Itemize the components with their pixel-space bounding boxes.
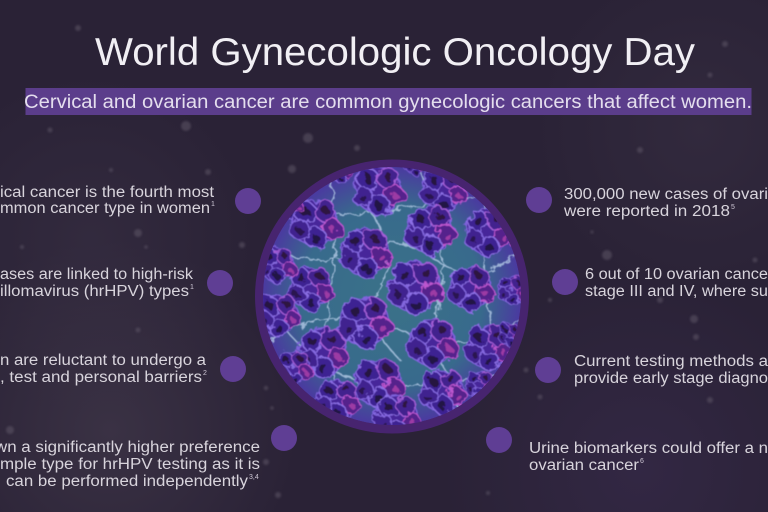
central cell illustration [255, 156, 529, 441]
title: World Gynecologic Oncology Day [95, 31, 696, 74]
left item 3: barriers: 2 [203, 370, 207, 377]
left item 2: hrHPV link: illomavirus (hrHPV) types [0, 283, 189, 300]
left item 3: barriers [0, 352, 246, 386]
left item 1: cervical cancer rank: ical cancer is the fourth most [0, 184, 215, 201]
left item 3: barriers: n are reluctant to undergo a [0, 352, 206, 369]
right item 3: testing methods: provide early stage diagno [574, 370, 768, 387]
left item 4: sample preference: 3,4 [249, 474, 259, 481]
right item 4: urine biomarkers: ovarian cancer [529, 457, 639, 474]
left item 2: hrHPV link [0, 266, 233, 300]
right item 1: new ovarian cases [526, 186, 768, 220]
left item 3: barriers: , test and personal barriers [0, 369, 202, 386]
left item 4: sample preference: wn a significantly higher preference [0, 439, 260, 456]
right item 2: late stage diagnosis: 6 out of 10 ovarian cance [585, 266, 768, 283]
right item 2: late stage diagnosis [552, 266, 768, 300]
right item 4: urine biomarkers: 6 [640, 458, 644, 465]
right item 3: testing methods: Current testing methods a [574, 353, 768, 370]
right item 4: urine biomarkers: Urine biomarkers could offer a n [529, 440, 768, 457]
left item 4: sample preference [0, 425, 297, 490]
left item 2: hrHPV link: 1 [190, 284, 194, 291]
left item 4: sample preference: mple type for hrHPV testing as it is [0, 456, 260, 473]
right item 1: new ovarian cases: 300,000 new cases of ovari [564, 186, 768, 203]
left item 2: hrHPV link: ases are linked to high-risk [0, 266, 193, 283]
subtitle banner: Cervical and ovarian cancer are common gynecologic cancers that affect women. [24, 92, 752, 113]
left item 1: cervical cancer rank [0, 184, 261, 217]
right item 4: urine biomarkers [486, 427, 768, 474]
left item 1: cervical cancer rank: mmon cancer type in women [0, 200, 210, 217]
right item 1: new ovarian cases: were reported in 2018 [563, 203, 730, 220]
left item 4: sample preference: can be performed independently [6, 473, 248, 490]
right item 1: new ovarian cases: 5 [731, 204, 735, 211]
right item 3: testing methods [535, 353, 768, 387]
right item 2: late stage diagnosis: stage III and IV, where su [585, 283, 768, 300]
left item 1: cervical cancer rank: 1 [211, 201, 215, 208]
